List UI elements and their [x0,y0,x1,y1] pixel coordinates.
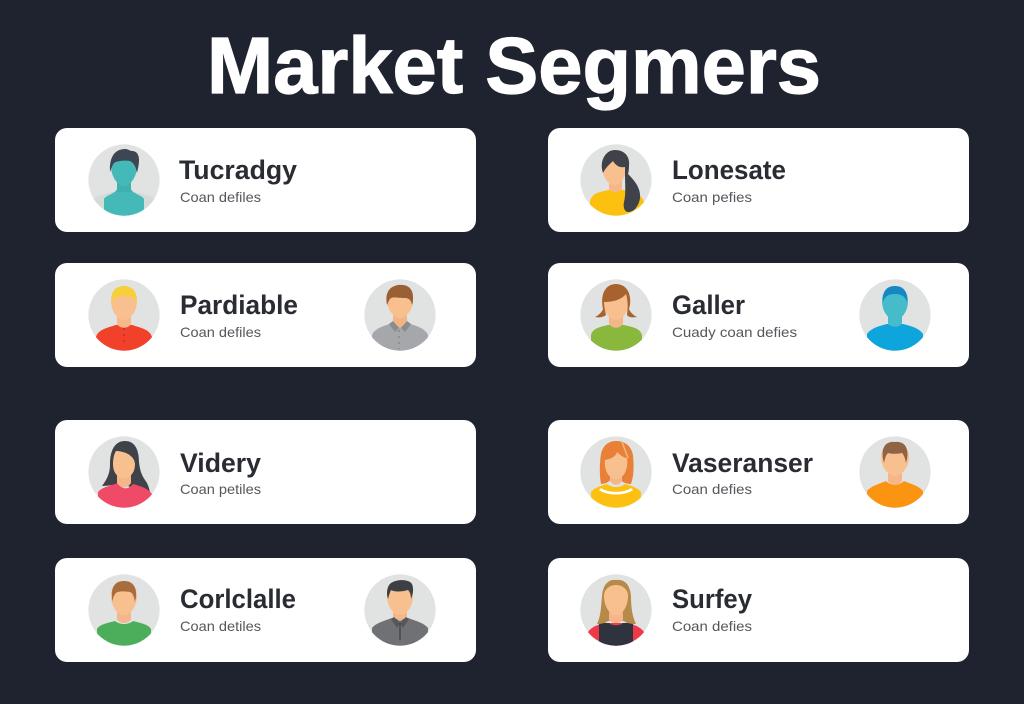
panel: Videry [55,420,476,524]
panel: Galler [548,263,969,367]
heading: Galler [672,290,745,320]
icon: blond man avatar [88,279,160,351]
heading: Surfey [672,584,752,614]
heading: Lonesate [672,155,786,185]
panel: Pardiable [55,263,476,367]
icon: man in orange avatar [859,436,931,508]
text block: Coan defies [672,481,752,497]
icon: woman in yellow avatar [580,144,652,216]
heading: Vaseranser [672,448,813,478]
text block: Coan petiles [180,481,261,497]
icon: woman with brown hair avatar [580,279,652,351]
icon: woman in pink avatar [88,436,160,508]
panel: Lonesate [548,128,969,232]
icon: blue man avatar [859,279,931,351]
icon: teal man avatar [88,144,160,216]
heading: Corlclalle [180,584,296,614]
heading: Tucradgy [179,155,297,185]
heading: Videry [180,448,261,478]
icon: blonde woman avatar [580,574,652,646]
heading: Pardiable [180,290,298,320]
title: Market Segmers [207,21,821,110]
icon: red-haired woman avatar [580,436,652,508]
icon: man in grey shirt avatar [364,279,436,351]
text block: Coan defies [672,618,752,634]
panel: Tucradgy [55,128,476,232]
text block: Coan defiles [180,189,261,205]
text block: Cuady coan defies [672,324,797,340]
icon: man in green avatar [88,574,160,646]
text block: Coan detiles [180,618,261,634]
panel: Vaseranser [548,420,969,524]
panel: Surfey [548,558,969,662]
icon: man in dark shirt avatar [364,574,436,646]
panel: Corlclalle [55,558,476,662]
text block: Coan defiles [180,324,261,340]
text block: Coan pefies [672,189,752,205]
